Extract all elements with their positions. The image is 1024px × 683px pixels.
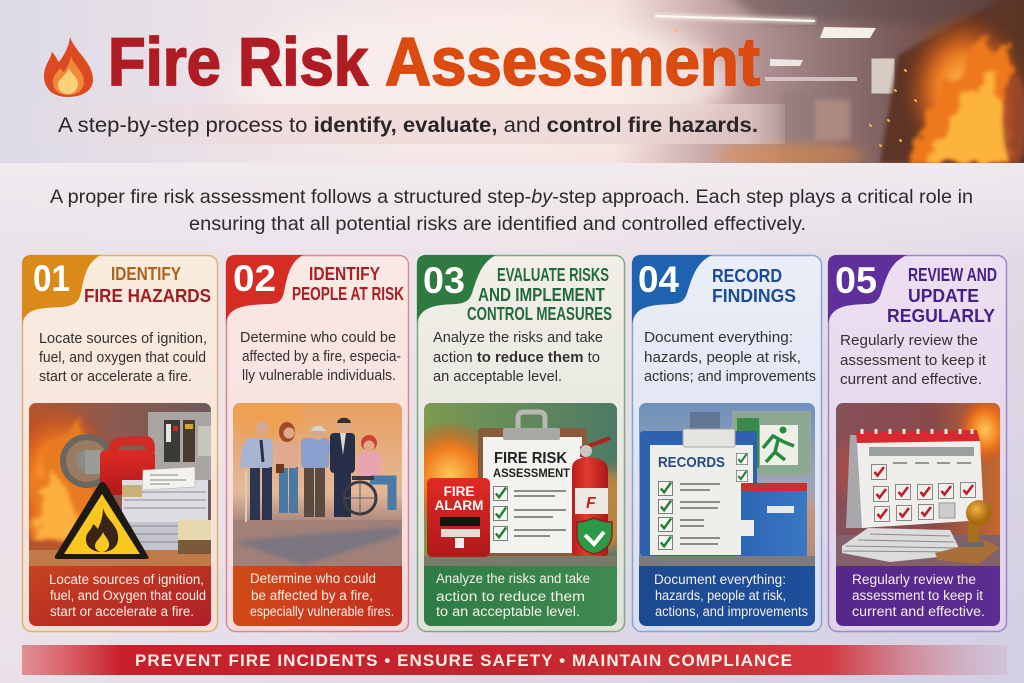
exit sign [733, 412, 810, 475]
step 03 heading [467, 265, 612, 324]
panel: step 05 review and update [828, 255, 1013, 632]
step 05 caption: current and effective. [852, 604, 985, 619]
step 02 heading: IDENTIFY [309, 264, 380, 284]
step 01 caption [49, 572, 206, 619]
man in suit [330, 418, 355, 517]
step 01 badge: 01 [33, 258, 70, 299]
step 03 description [433, 330, 603, 385]
header banner [0, 0, 1024, 166]
step 04 description: hazards, people at risk, [644, 350, 801, 366]
step 03 caption [436, 571, 590, 619]
panel: step 03 evaluate risks [416, 254, 626, 632]
step 05 description [840, 333, 986, 388]
clipboard [478, 412, 587, 556]
step 05 heading: REGULARLY [887, 306, 995, 326]
step 05 heading [887, 265, 997, 326]
step 03 badge: 03 [423, 260, 465, 301]
step 02 heading: PEOPLE AT RISK [292, 284, 404, 304]
step 03 heading: EVALUATE RISKS [497, 265, 609, 285]
step 03 caption: action to reduce them [436, 589, 585, 604]
step 04 caption: hazards, people at risk, [655, 588, 786, 603]
step 05 illustration [836, 403, 1000, 626]
rubber stamp [935, 500, 1000, 564]
step 05 heading: REVIEW AND [908, 265, 997, 285]
step 01 illustration [29, 403, 211, 626]
step 02 caption: Determine who could [250, 571, 376, 586]
intro paragraph: A proper fire risk assessment follows a structured step- by-step approach. Each step plays a critical role in [50, 186, 973, 208]
woman [276, 422, 298, 513]
intro paragraph: ensuring that all potential risks are identified and controlled effectively. [189, 213, 806, 235]
step 02 caption: be affected by a fire, [251, 588, 373, 603]
step 02 caption [250, 571, 394, 619]
step 01 description [39, 331, 207, 385]
step 04 description: Document everything: [644, 330, 793, 346]
panel: step 04 record findings [632, 255, 830, 632]
person in wheelchair [344, 435, 392, 514]
step 01 heading [84, 264, 211, 306]
wall calendar [846, 429, 984, 528]
footer banner: PREVENT FIRE INCIDENTS • ENSURE SAFETY • MAINTAIN COMPLIANCE [135, 651, 792, 670]
step 03 description: an acceptable level. [433, 369, 562, 385]
step 04 badge: 04 [638, 259, 679, 300]
step 02 description: lly vulnerable individuals. [242, 368, 396, 384]
step 04 heading: RECORD [712, 266, 782, 286]
step 04 caption [654, 572, 808, 619]
step 05 caption: assessment to keep it [852, 588, 983, 603]
person with cane [243, 421, 273, 522]
step 03 description: action to reduce them to [433, 350, 600, 366]
step 01 description: start or accelerate a fire. [39, 369, 192, 385]
step 04 caption: actions, and improvements [655, 604, 808, 619]
step 03 caption: Analyze the risks and take [436, 571, 590, 586]
paper stack [842, 528, 958, 562]
intro paragraph [0, 163, 1024, 263]
step 02 caption: especially vulnerable fires. [250, 604, 394, 619]
footer banner [22, 645, 1007, 675]
step 05 caption: Regularly review the [852, 572, 976, 587]
subtitle band [30, 104, 785, 144]
panel: step 02 identify people at risk [225, 255, 408, 632]
fire alarm [427, 478, 490, 557]
step 04 heading: FINDINGS [712, 286, 796, 306]
step 01 heading: FIRE HAZARDS [84, 286, 211, 306]
fire alarm: FIRE [444, 484, 474, 499]
step 04 illustration [639, 403, 830, 626]
step 03 description: Analyze the risks and take [433, 330, 603, 346]
step 01 heading: IDENTIFY [111, 264, 181, 284]
step 05 badge [828, 255, 907, 324]
step 05 caption [852, 572, 985, 619]
binder with records sheet [640, 429, 757, 556]
step 04 badge [632, 255, 712, 324]
step 03 heading: CONTROL MEASURES [467, 304, 612, 324]
step 01 badge [22, 255, 101, 326]
step 05 badge: 05 [835, 260, 877, 301]
step 05 description: current and effective. [840, 372, 982, 388]
icon: flame [44, 37, 93, 97]
clipboard: ASSESSMENT [493, 466, 571, 480]
step 02 badge: 02 [233, 258, 276, 299]
step 04 heading [712, 266, 796, 306]
step 04 description [644, 330, 816, 385]
step 02 description: Determine who could be [240, 330, 396, 346]
step 04 description: actions; and improvements [644, 369, 816, 385]
step 03 caption: to an acceptable level. [436, 604, 580, 619]
step 02 description: affected by a fire, especia- [242, 349, 401, 365]
step 02 description [240, 330, 401, 384]
fire alarm: ALARM [435, 498, 483, 513]
step 03 badge [417, 255, 496, 324]
fire extinguisher [572, 438, 612, 556]
step 02 illustration [225, 391, 402, 626]
panel: step 01 identify fire hazards [5, 255, 218, 632]
blue file box [741, 483, 807, 556]
step 03 heading: AND IMPLEMENT [478, 285, 605, 305]
step 01 description: Locate sources of ignition, [39, 331, 207, 347]
clipboard: FIRE RISK [494, 450, 567, 467]
step 01 caption: Locate sources of ignition, [49, 572, 204, 587]
step 05 description: assessment to keep it [840, 353, 986, 369]
step 01 caption: start or accelerate a fire. [50, 604, 194, 619]
fire extinguisher: F [586, 495, 597, 512]
title: Fire Risk [108, 24, 368, 100]
title [44, 24, 760, 100]
binder with records sheet: RECORDS [658, 454, 725, 471]
step 04 caption: Document everything: [654, 572, 786, 587]
elderly man [301, 426, 330, 517]
step 05 heading: UPDATE [908, 286, 979, 306]
step 02 heading [292, 264, 404, 304]
step 01 caption: fuel, and Oxygen that could [50, 588, 206, 603]
title: Assessment [385, 24, 760, 100]
step 03 illustration [424, 403, 617, 626]
step 05 description: Regularly review the [840, 333, 978, 349]
step 02 badge [226, 255, 303, 324]
step 01 description: fuel, and oxygen that could [39, 350, 206, 366]
subtitle band: A step-by-step process to identify, evaluate, and control fire hazards. [58, 113, 758, 137]
